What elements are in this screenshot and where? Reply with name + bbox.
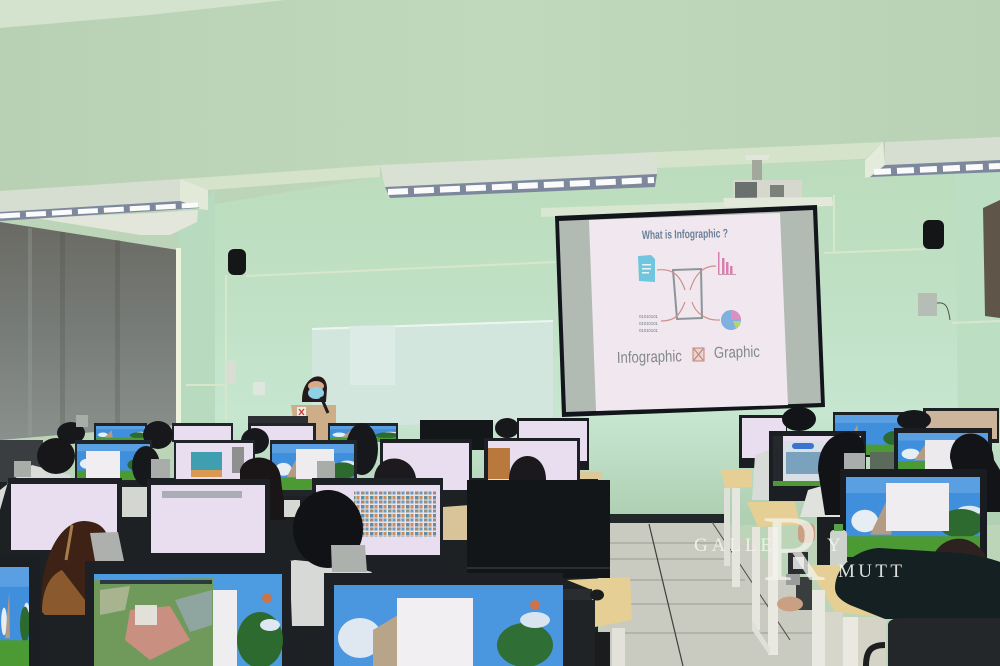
student large head [293,490,363,568]
student long hair [240,458,286,520]
water bottle [830,524,847,585]
label: Graphic: Graphic [714,344,760,362]
right group desk rear [721,470,752,587]
centre desk small [443,505,470,540]
screen housing bar [541,197,834,217]
under desk equipment [595,632,610,666]
student hair [132,446,160,486]
binary text: 01010101 [639,328,658,333]
sleeping student [835,539,1000,619]
watermark: MUTT: MUTT [838,561,902,582]
projection screen [555,205,825,417]
main desk far wood [567,577,632,627]
name cards [14,415,335,478]
right group middle monitors [769,428,992,501]
binary text: 01010101 [639,314,658,319]
icon: cross box [693,348,704,361]
wall conduit lines [186,195,1000,420]
ceiling highlight corner [0,0,285,28]
right group far students [752,407,931,500]
student long hair [818,432,864,515]
left dark monitor [0,440,43,482]
right group far monitors [739,408,999,468]
student head [509,456,546,480]
dark base of left seating area [0,478,598,666]
student white shirt [800,482,842,517]
student with dark hair [950,433,1000,512]
name card [90,532,124,561]
slide title: What is Infographic ? [642,226,728,242]
far row students [57,418,519,475]
side wall pillar [178,190,215,428]
student arm [777,596,803,612]
student head [782,407,816,431]
ceiling beam right [657,142,883,168]
background: ceiling [0,0,1000,200]
floor [600,522,880,666]
front row monitors [0,555,563,666]
second row monitors [75,418,589,496]
binary text: 01010101 [639,321,658,326]
projector [723,155,832,207]
icon grid on screen [354,491,436,537]
wall switch box [918,293,950,320]
third row monitors [8,478,610,578]
speaker right [923,220,944,249]
whiteboard [312,320,553,428]
right wall section [955,166,1000,420]
dark wall panel right [983,200,1000,318]
student head [374,458,416,478]
watermark: Y: Y [827,535,841,556]
binary text [639,314,658,333]
right group desk middle [747,502,800,656]
front chairs [563,600,595,666]
name card [331,545,367,572]
watermark: GALLE: GALLE [694,535,772,556]
left ceiling light [0,179,208,221]
speaker left [228,249,246,275]
ceiling beam left [180,165,380,190]
watermark: large R: R [762,497,825,601]
student white shirt [266,560,372,626]
second row students [0,438,546,520]
centre ceiling light [380,152,657,198]
icon: document [638,255,655,282]
name card [844,453,865,470]
far row monitors [94,416,493,450]
diagram: central frame [673,269,702,319]
student hair highlight [66,525,72,560]
student head [897,410,931,430]
student hair bottom tint [42,570,85,615]
right group front desk [807,565,886,666]
front chair right [866,618,1000,666]
baseboard [608,514,726,523]
student trousers [796,577,812,610]
socket panels [226,361,236,383]
right group middle students [796,432,1000,610]
desk leg [612,628,625,666]
student jacket [870,452,895,470]
student white shirt [752,442,790,500]
small rear desk [578,472,602,479]
floor tile lines [610,543,815,633]
thermostat [253,382,265,395]
back wall [178,160,1000,525]
foreground students left [42,490,372,626]
student arm skin [798,523,815,543]
student head left [37,438,75,474]
icon: pie chart [721,310,741,330]
icon: bar chart [718,252,736,275]
presenter [291,376,336,440]
student shirt small [284,500,300,517]
air conditioner [35,210,198,235]
student body [122,487,148,517]
right group front monitor [840,469,987,561]
student with brown hair [42,521,109,615]
phone on stand [786,552,808,585]
keyboard and mouse [562,589,604,600]
chair behind desk [817,517,841,567]
window blinds [0,222,181,440]
right ceiling light [865,137,1000,178]
student body left [0,465,72,510]
label: Infographic: Infographic [617,348,682,367]
diagram: arrows [657,266,720,321]
watermark [694,497,902,601]
